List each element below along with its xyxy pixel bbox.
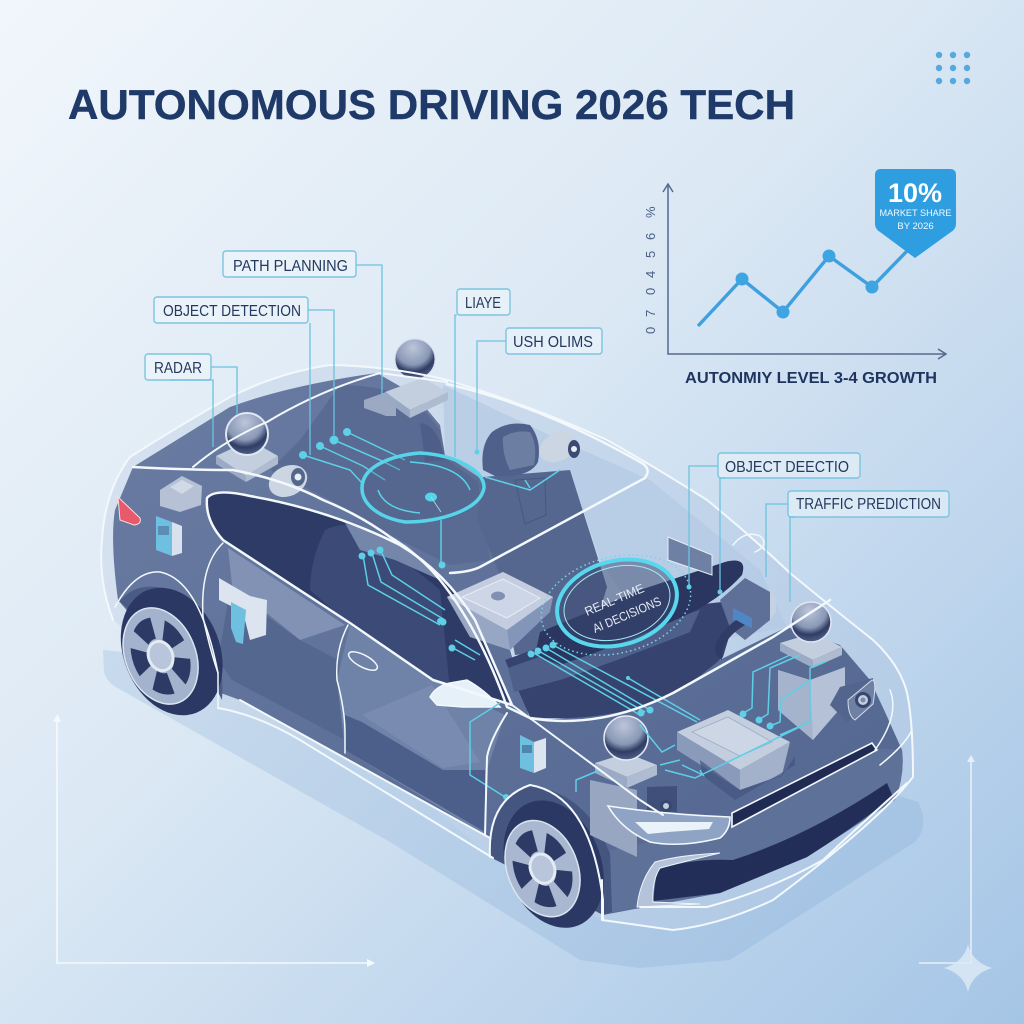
windshield tint [443, 385, 787, 640]
front right sensor stack [778, 602, 875, 740]
compute unit [447, 572, 553, 650]
line chart: autonomy level growth: 7 [643, 310, 658, 317]
sensor card fender [520, 735, 546, 773]
ground shadow [103, 650, 923, 968]
corner axis: bottom right [919, 755, 975, 963]
label: radar [145, 354, 237, 447]
tail light [118, 497, 140, 525]
callout: market share badge: BY 2026 [897, 221, 934, 232]
camera: rear [264, 459, 312, 503]
glass shell [101, 365, 913, 930]
line chart: autonomy level growth [643, 169, 956, 387]
dashboard band [535, 561, 743, 665]
chart title: AUTONMIY LEVEL 3-4 GROWTH [685, 370, 937, 387]
dome sensor: rear [216, 413, 278, 482]
line chart: autonomy level growth: 6 [643, 233, 658, 240]
label: traffic prediction [766, 491, 949, 602]
icon: dot grid [936, 52, 970, 84]
ring: path planning [362, 453, 484, 568]
label: radar: RADAR [154, 360, 202, 377]
label: liaye: LIAYE [465, 295, 501, 312]
front wheel [485, 785, 622, 943]
callout: market share badge: MARKET SHARE [880, 208, 952, 219]
rear shelf shade [270, 385, 490, 565]
label: object detection [154, 297, 334, 455]
line chart: autonomy level growth: 5 [643, 251, 658, 258]
car body [113, 373, 903, 915]
line chart: autonomy level growth: 0 [643, 288, 658, 295]
label: object detection: OBJECT DETECTION [163, 303, 301, 320]
corner axis: bottom left [53, 714, 375, 967]
headlight [608, 806, 730, 844]
white glass outline [101, 365, 913, 930]
rear fender [115, 587, 222, 700]
door armrest [362, 685, 480, 768]
line chart: autonomy level growth: 0 [643, 327, 658, 334]
label: object deectio: OBJECT DEECTIO [725, 459, 849, 476]
label: ush olims: USH OLIMS [513, 334, 593, 351]
ring: real-time ai decisions: REAL-TIME [583, 581, 646, 619]
front bumper [610, 743, 903, 912]
label: ush olims [474, 328, 602, 454]
rear wheel [102, 572, 241, 731]
ring: real-time ai decisions [531, 540, 701, 670]
front door lower shade [345, 715, 485, 832]
rear seat [420, 423, 445, 462]
front seat [477, 424, 607, 655]
ring: real-time ai decisions: AI DECISIONS [591, 594, 663, 636]
display panel [668, 537, 712, 575]
label: liaye [455, 289, 510, 457]
icon: sparkle star [944, 944, 992, 992]
sensor card door [219, 578, 267, 644]
circuit traces [299, 428, 825, 800]
rear door upper panel [228, 548, 345, 640]
title: AUTONOMOUS DRIVING 2026 TECH [68, 81, 795, 128]
ai processor board [677, 710, 795, 800]
interior seat seen through window [310, 525, 450, 690]
label: object deectio [686, 453, 860, 594]
label: path planning: PATH PLANNING [233, 258, 348, 275]
camera: seat [534, 426, 582, 468]
line chart: autonomy level growth: % [643, 206, 658, 218]
front door panel [337, 625, 505, 835]
car illustration [101, 339, 923, 968]
callout: market share badge: 10% [888, 178, 942, 208]
label: path planning [223, 251, 382, 395]
mid floor band [508, 610, 700, 692]
line chart: autonomy level growth: 4 [643, 271, 658, 278]
rear sensor module [160, 476, 202, 512]
sensor card rear [156, 516, 182, 556]
roof bracket [364, 392, 396, 416]
mirror [430, 680, 500, 707]
front left sensor stack [590, 716, 677, 857]
grille band [732, 743, 877, 827]
firewall module [715, 578, 776, 660]
label: traffic prediction: TRAFFIC PREDICTION [796, 496, 941, 513]
front fender [490, 785, 618, 915]
rear door lower panel [218, 590, 345, 740]
navy floor [505, 600, 740, 718]
side window [207, 492, 512, 705]
dome sensor: roof centre [385, 339, 448, 418]
callout: market share badge [875, 169, 956, 258]
